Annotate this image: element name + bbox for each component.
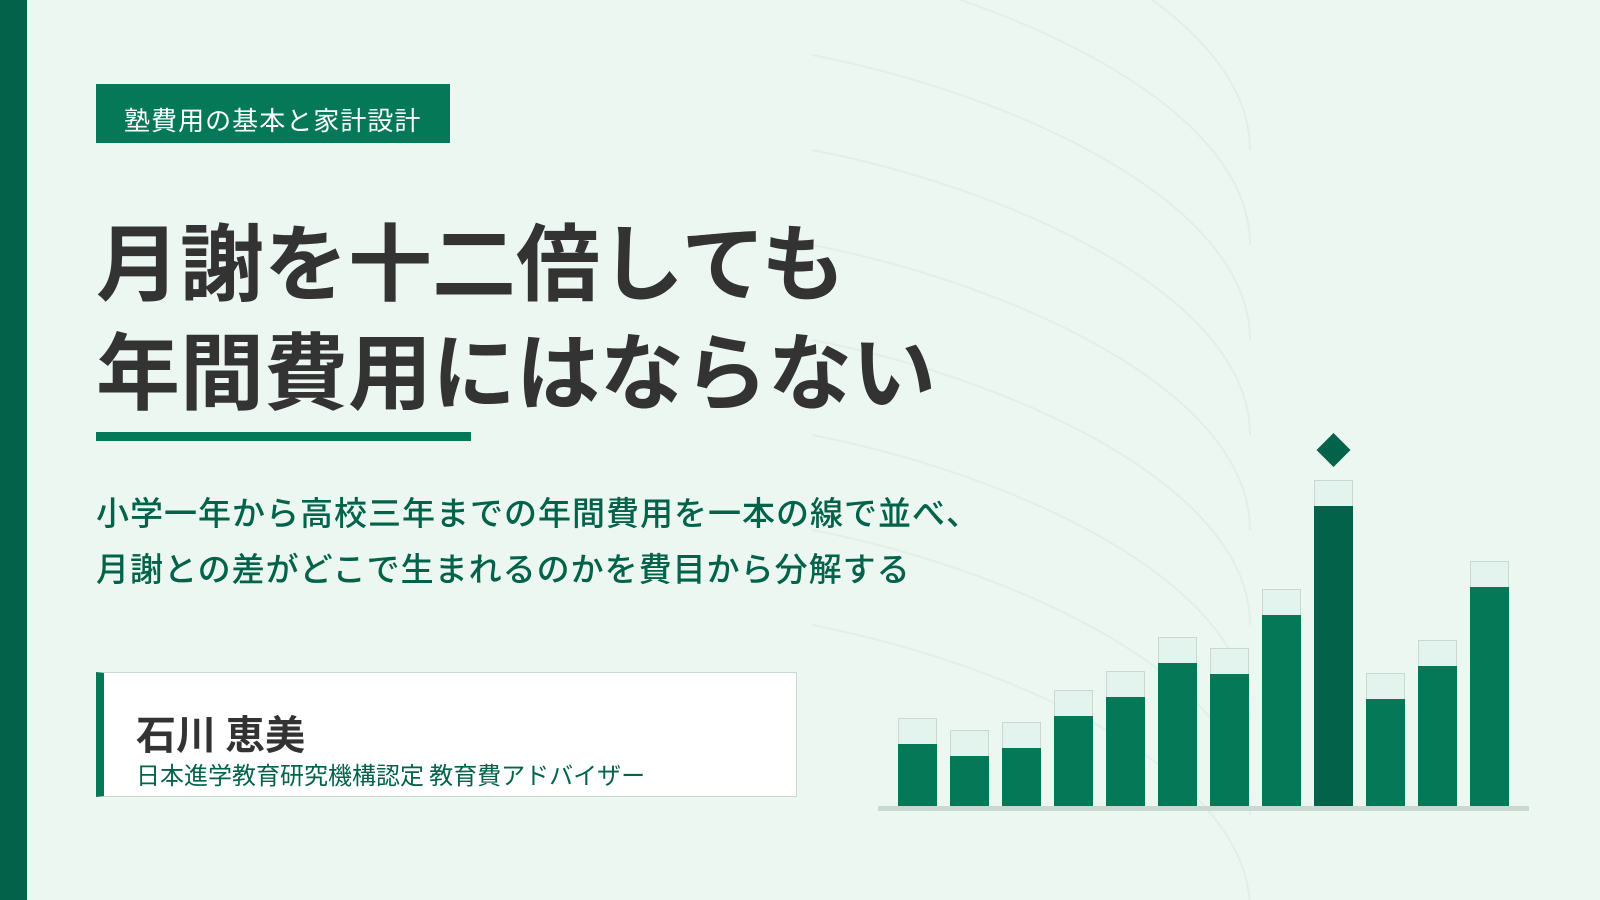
category tag <box>96 84 450 143</box>
title: 月謝を十二倍しても <box>96 218 845 312</box>
bar chart <box>878 433 1529 811</box>
title underline <box>96 432 471 441</box>
bar group 11 <box>1418 640 1457 806</box>
left accent strip <box>0 0 27 900</box>
author role: 日本進学教育研究機構認定 教育費アドバイザー <box>136 763 645 790</box>
title <box>96 218 936 421</box>
chart baseline <box>878 806 1529 811</box>
bar group 8 <box>1262 590 1301 806</box>
bar group 6 <box>1158 638 1197 806</box>
author card <box>96 672 797 797</box>
subtitle: 月謝との差がどこで生まれるのかを費目から分解する <box>96 551 911 588</box>
bar group 7 <box>1210 648 1249 806</box>
bar group 5 <box>1106 672 1145 806</box>
subtitle: 小学一年から高校三年までの年間費用を一本の線で並べ、 <box>96 495 980 532</box>
author name: 石川 恵美 <box>136 714 305 758</box>
bar group 2 <box>950 730 989 806</box>
bar group 9 highlighted <box>1314 480 1353 806</box>
category tag: 塾費用の基本と家計設計 <box>124 106 421 136</box>
bar group 12 <box>1470 562 1509 806</box>
icon: diamond marker <box>1316 433 1350 467</box>
subtitle <box>96 495 980 588</box>
bar group 10 <box>1366 674 1405 806</box>
bar group 4 <box>1054 690 1093 806</box>
bar group 1 <box>898 718 937 806</box>
bar group 3 <box>1002 722 1041 806</box>
title: 年間費用にはならない <box>96 327 936 421</box>
